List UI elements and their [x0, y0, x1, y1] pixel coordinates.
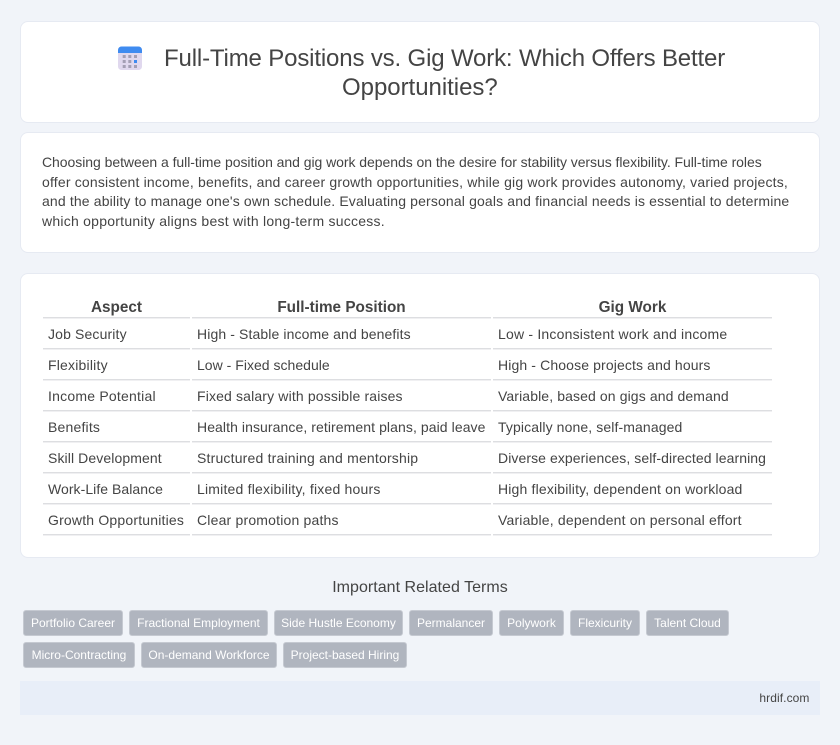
table: comparison	[43, 299, 772, 536]
table: comparison: High flexibility, dependent on workload	[498, 481, 743, 497]
related term tags: Permalancer	[417, 616, 485, 630]
related term tags: Project-based Hiring	[291, 648, 399, 662]
related term tags: Portfolio Career	[31, 616, 115, 630]
text block: intro paragraph: and the ability to manage one's own schedule. Evaluating personal goals and financial needs is essential to determine	[42, 193, 789, 209]
text block: intro paragraph: Choosing between a full-time position and gig work depends on the desire for stability versus flexibility. Full-time roles	[42, 154, 762, 170]
related term tags: On-demand Workforce	[148, 648, 270, 662]
heading: related terms: Important Related Terms	[332, 579, 508, 596]
related term tags: Fractional Employment	[137, 616, 260, 630]
panel: intro	[20, 132, 820, 253]
related term tags: Micro-Contracting	[32, 648, 126, 662]
table: comparison: Fixed salary with possible raises	[197, 388, 403, 404]
text block: intro paragraph: offer consistent income, benefits, and career growth opportunities, while gig work provides autonomy, varied projects,	[42, 174, 788, 190]
panel: comparison table	[20, 273, 820, 558]
table: comparison: Benefits	[48, 419, 100, 435]
table: comparison: Health insurance, retirement plans, paid leave	[197, 419, 486, 435]
icon: calendar	[118, 46, 142, 70]
table: comparison: Skill Development	[48, 450, 162, 466]
related term tags	[23, 610, 729, 668]
table: comparison: Job Security	[48, 326, 127, 342]
table: comparison: High - Stable income and benefits	[197, 326, 411, 342]
table: comparison: Work-Life Balance	[48, 481, 163, 497]
table: comparison: Income Potential	[48, 388, 156, 404]
related term tags: Side Hustle Economy	[281, 616, 396, 630]
table: comparison: Full-time Position	[277, 299, 406, 316]
title: Opportunities?	[342, 74, 498, 101]
related term tags: Flexicurity	[578, 616, 632, 630]
footer bar	[20, 681, 820, 714]
table: comparison: Variable, based on gigs and demand	[498, 388, 729, 404]
related term tags: Talent Cloud	[654, 616, 721, 630]
panel: title card	[20, 21, 820, 123]
table: comparison: Gig Work	[599, 299, 666, 316]
table: comparison: Aspect	[91, 299, 142, 316]
footer source label: hrdif.com	[759, 691, 810, 705]
title: Full-Time Positions vs. Gig Work: Which Offers Better	[164, 45, 725, 72]
table: comparison: Low - Fixed schedule	[197, 357, 330, 373]
table: comparison: Low - Inconsistent work and income	[498, 326, 727, 342]
table: comparison: Structured training and mentorship	[197, 450, 418, 466]
title	[164, 45, 725, 101]
text block: intro paragraph: which opportunity aligns best with long-term success.	[42, 213, 385, 229]
table: comparison: Clear promotion paths	[197, 512, 339, 528]
table: comparison: Growth Opportunities	[48, 512, 184, 528]
table: comparison: Flexibility	[48, 357, 108, 373]
table: comparison: Limited flexibility, fixed hours	[197, 481, 381, 497]
table: comparison: Variable, dependent on personal effort	[498, 512, 742, 528]
related term tags: Polywork	[507, 616, 556, 630]
table: comparison: Diverse experiences, self-directed learning	[498, 450, 766, 466]
table: comparison: Typically none, self-managed	[498, 419, 682, 435]
text block: intro paragraph	[42, 154, 789, 229]
table: comparison: High - Choose projects and hours	[498, 357, 711, 373]
